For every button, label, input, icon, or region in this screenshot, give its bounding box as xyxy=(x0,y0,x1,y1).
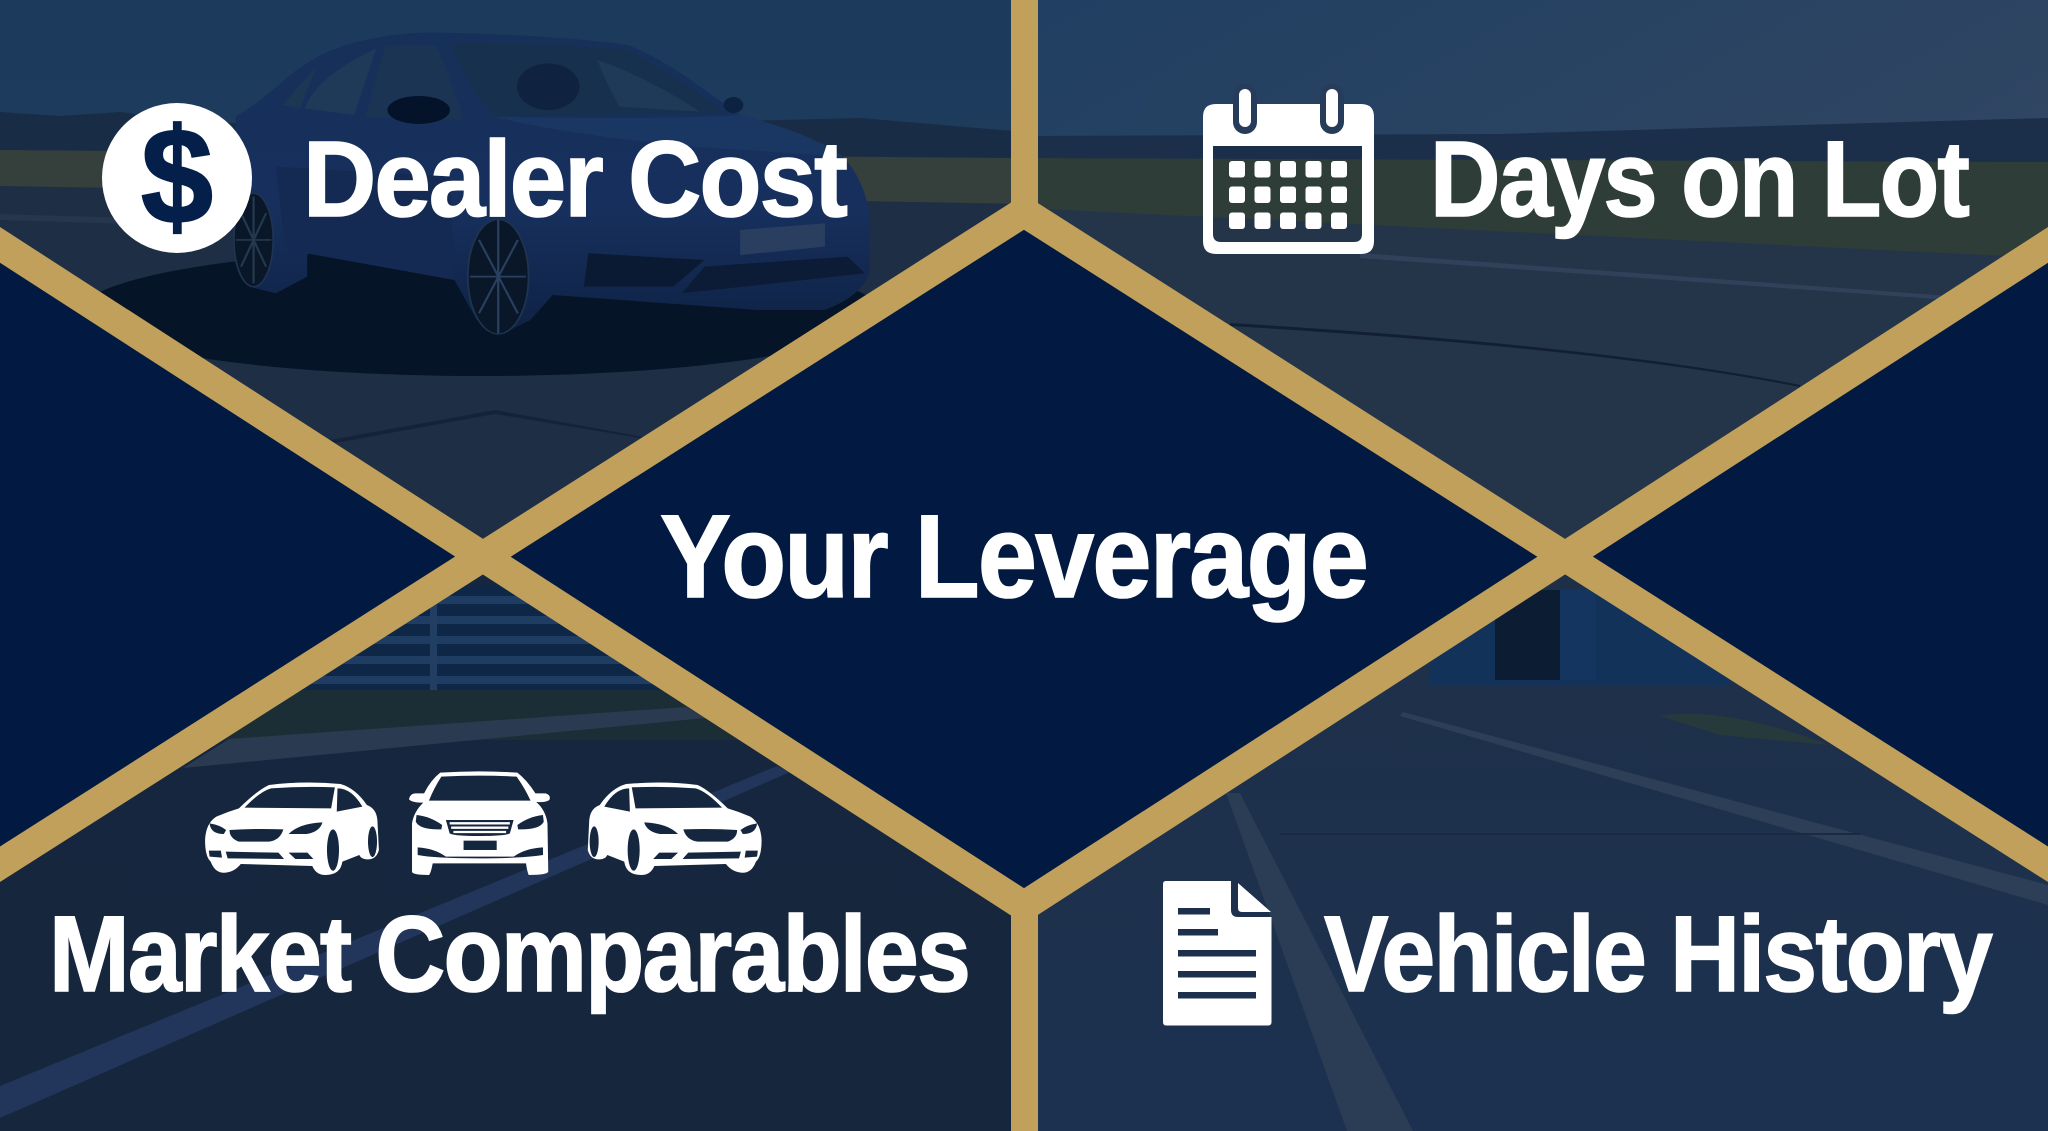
label: Dealer Cost: Dealer Cost xyxy=(303,118,847,239)
bottom-right scene: building, hedge and road markings xyxy=(1024,566,2048,1131)
panel: navy diamond and side triangles xyxy=(0,212,2048,906)
center heading: Your Leverage: Your Leverage xyxy=(660,491,1367,623)
top-left scene: sky, horizon and road xyxy=(0,0,1024,566)
panel: dealer cost xyxy=(102,100,847,253)
car shadow xyxy=(80,248,880,376)
icon: three cars xyxy=(205,771,762,875)
icon: dollar coin: $ xyxy=(141,100,213,252)
panel: market comparables xyxy=(49,771,969,1014)
label: Vehicle History: Vehicle History xyxy=(1324,893,1993,1014)
panel: days on lot xyxy=(1203,84,1969,254)
panel: vehicle history xyxy=(1163,881,1993,1026)
icon: dollar coin xyxy=(102,100,252,253)
icon: car facing front xyxy=(409,771,550,875)
icon: car facing left xyxy=(205,783,379,875)
top-right scene: sky, hills, grass and road xyxy=(1024,0,2048,566)
icon: document xyxy=(1163,881,1272,1026)
label: Market Comparables: Market Comparables xyxy=(49,893,969,1014)
bottom-left scene: fence, hedge, curb and road xyxy=(0,566,1024,1131)
label: Days on Lot: Days on Lot xyxy=(1430,118,1969,239)
icon: car facing right xyxy=(588,783,762,875)
icon: calendar xyxy=(1203,84,1374,254)
car photo: blue sedan xyxy=(233,33,870,334)
